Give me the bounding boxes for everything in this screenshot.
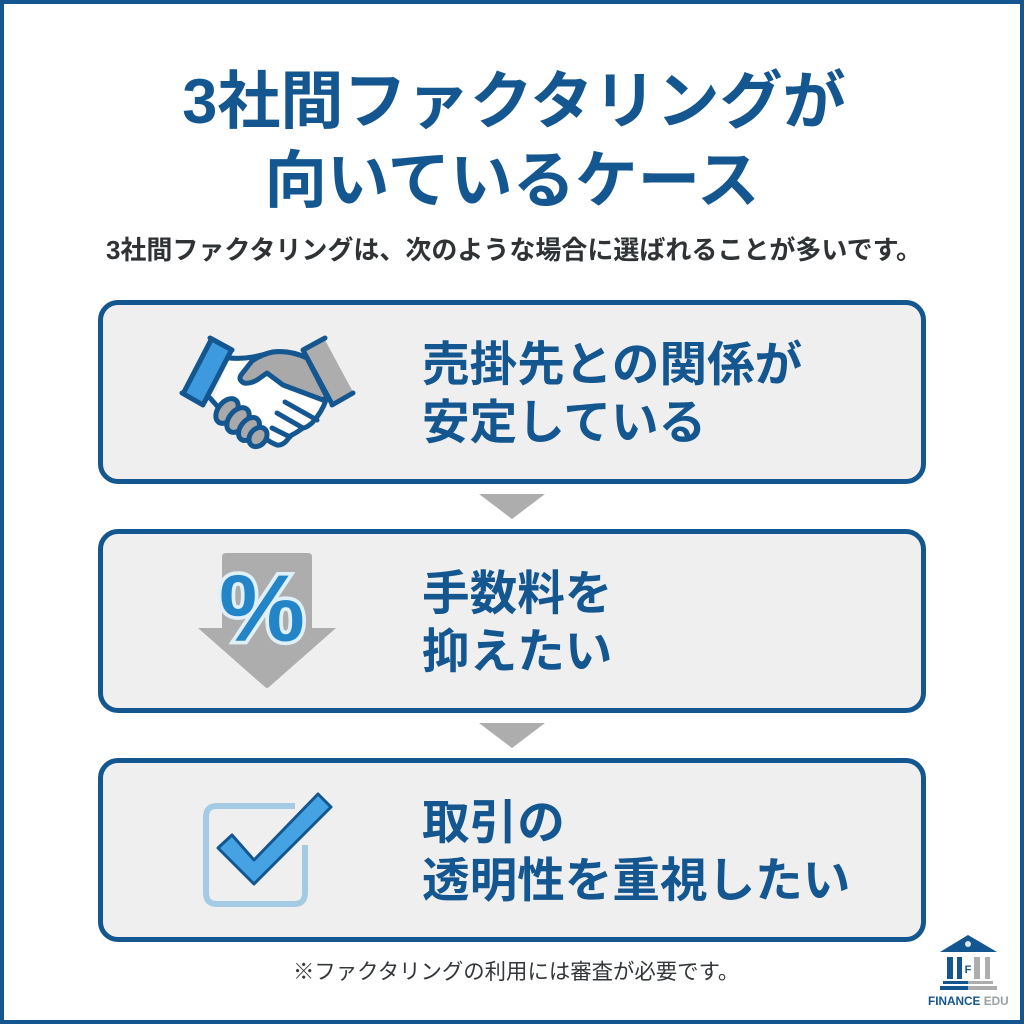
panel: stable relationship xyxy=(98,300,926,484)
icon: percent down arrow: % xyxy=(219,556,305,662)
subtitle: 3社間ファクタリングは、次のような場合に選ばれることが多いです。 xyxy=(106,235,922,265)
card text xyxy=(422,568,612,679)
text: 向いているケース xyxy=(264,146,760,216)
arrow 1 xyxy=(479,494,545,519)
icon: handshake xyxy=(180,336,356,450)
card text: 手数料を xyxy=(422,568,612,621)
panel: reduce fees xyxy=(98,529,926,713)
card text: 取引の xyxy=(422,797,565,850)
card text xyxy=(422,797,850,908)
icon: checkbox xyxy=(203,792,333,907)
card text xyxy=(422,339,802,450)
logo: Finance Edu xyxy=(928,935,1009,1008)
panel: transparency xyxy=(98,758,926,942)
arrow 2 xyxy=(479,723,545,748)
icon: bank building: F xyxy=(965,964,972,976)
icon: percent down arrow xyxy=(198,553,336,688)
card text: 安定している xyxy=(422,397,706,450)
icon: bank building xyxy=(940,935,997,990)
card text: 抑えたい xyxy=(422,626,612,679)
title xyxy=(182,67,846,216)
card text: 売掛先との関係が xyxy=(422,339,802,392)
logo text: FINANCE EDU xyxy=(928,994,1009,1008)
footnote: ※ファクタリングの利用には審査が必要です。 xyxy=(293,960,739,984)
text: 3社間ファクタリングが xyxy=(182,67,846,137)
card text: 透明性を重視したい xyxy=(422,855,850,908)
